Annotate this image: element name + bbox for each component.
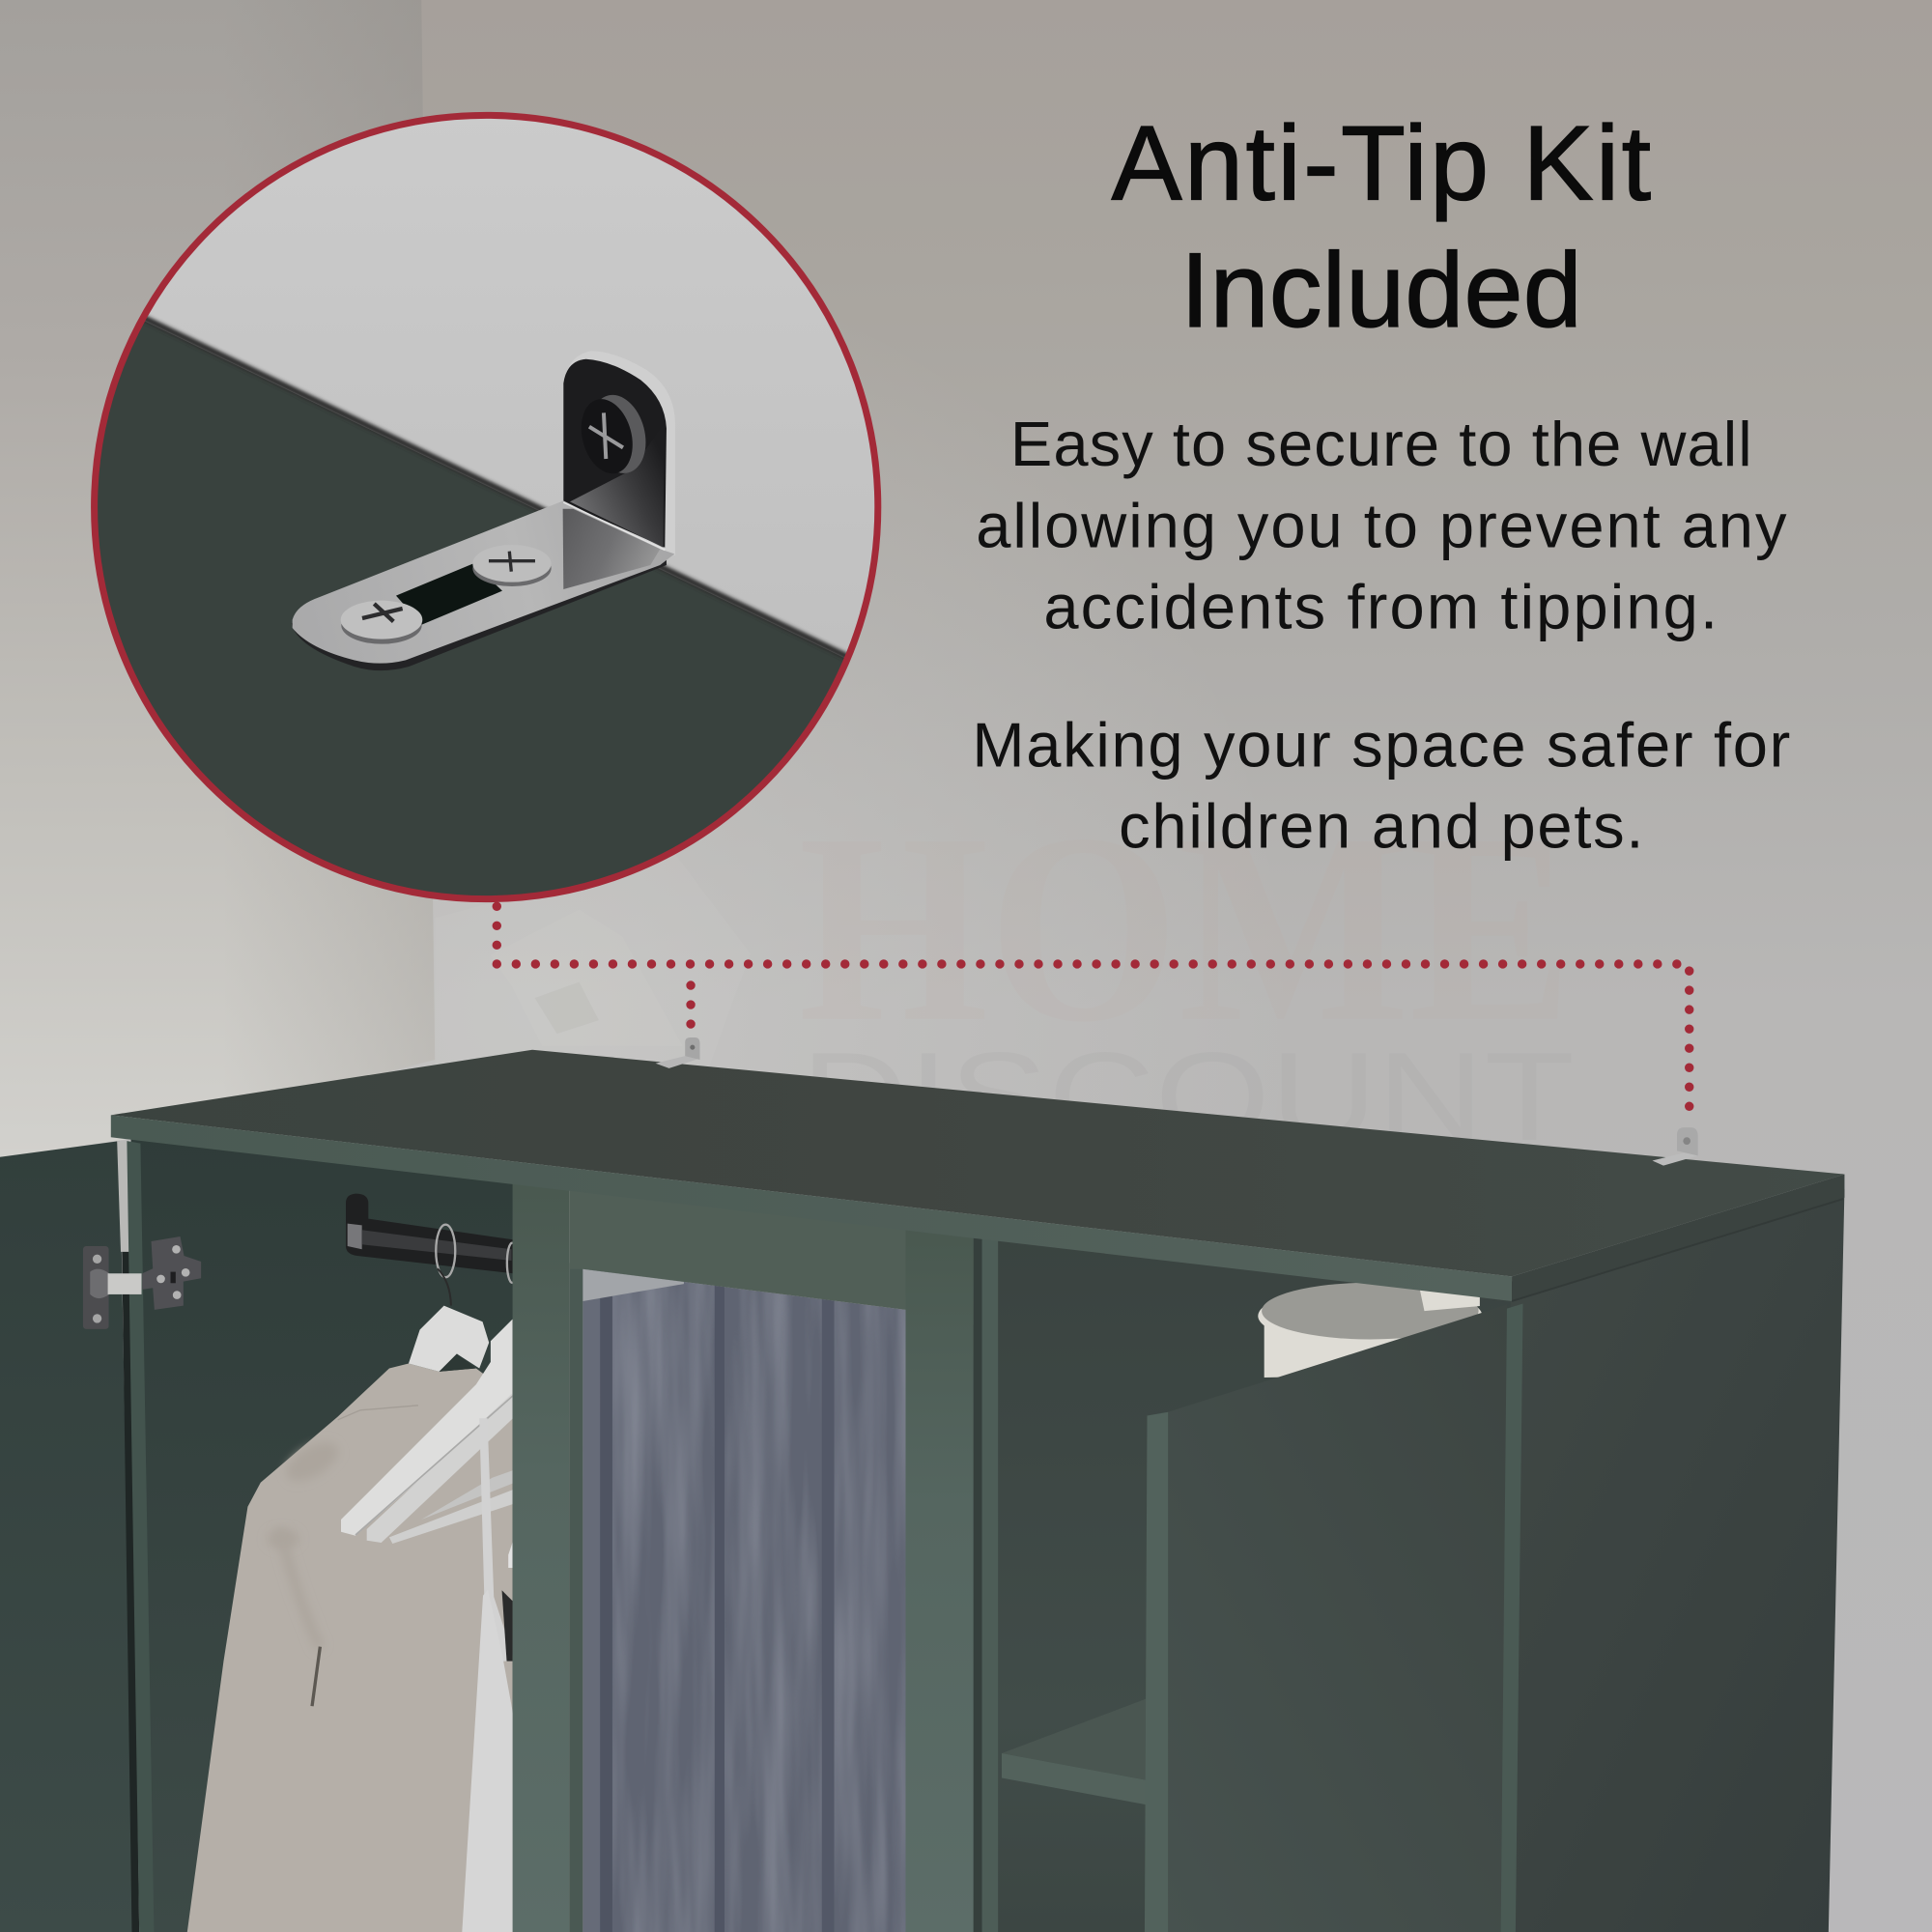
vertical divider strip: [971, 1220, 998, 1932]
open right door: [1145, 1303, 1523, 1932]
title: Included: [1180, 232, 1582, 350]
left open door: [0, 1141, 154, 1932]
circle wall background: [147, 118, 875, 653]
right compartment interior: [980, 1220, 1513, 1932]
description text: accidents from tipping.: [1043, 572, 1718, 642]
safety note text: [972, 709, 1790, 862]
zoom circle detail: [74, 111, 899, 912]
white dress strap and shadow: [479, 1418, 515, 1662]
white hangers: [341, 1306, 515, 1544]
faint brand watermark: [435, 778, 1575, 1167]
description text: [976, 409, 1787, 642]
left compartment interior: [130, 1127, 518, 1932]
centre door frame: [513, 1171, 974, 1932]
cabinet top surface in circle: [98, 321, 844, 896]
enlarged steel bracket: [292, 351, 675, 670]
dotted connector lines: [497, 906, 1690, 1112]
stored round box: [1258, 1283, 1482, 1378]
cabinet top board: [111, 1050, 1844, 1301]
jacket: [187, 1364, 515, 1932]
safety note text: Making your space safer for: [972, 709, 1790, 780]
cabinet right side: [1511, 1189, 1844, 1932]
centre door mirror panel: [582, 1266, 906, 1932]
hanging group: rail, jacket, hangers, dress: [187, 1194, 518, 1932]
faint brand watermark: DISCOUNT: [801, 1026, 1575, 1167]
faint brand watermark: HOME: [799, 778, 1573, 1078]
small anti-tip bracket right: [1652, 1127, 1698, 1166]
small anti-tip bracket left: [656, 1037, 699, 1068]
red circle outline: [95, 115, 878, 899]
safety note text: children and pets.: [1119, 791, 1644, 862]
white dress lower: [462, 1589, 515, 1932]
description text: Easy to secure to the wall: [1010, 409, 1752, 479]
clothes rail: [346, 1194, 518, 1306]
title: [1112, 105, 1651, 350]
description text: allowing you to prevent any: [976, 490, 1787, 560]
board joint shadow line: [145, 314, 847, 659]
door hinge: [83, 1236, 201, 1329]
title: Anti-Tip Kit: [1112, 105, 1651, 223]
interior shelf: [1002, 1698, 1149, 1805]
